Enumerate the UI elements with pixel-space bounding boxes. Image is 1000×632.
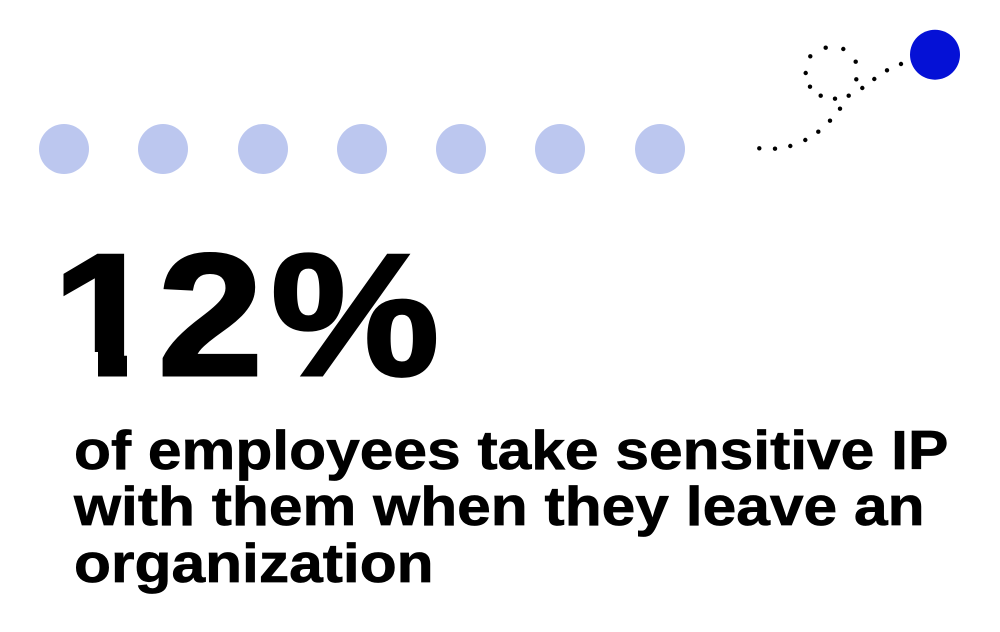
row of seven light blue dots <box>39 124 685 174</box>
description text <box>73 419 948 594</box>
description text: of employees take sensitive IP <box>74 419 948 481</box>
big statistic: 12% <box>52 217 439 412</box>
description text: with them when they leave an <box>74 475 924 537</box>
icon: dotted flight path ending in blue circle <box>757 30 960 151</box>
description text: organization <box>74 532 433 594</box>
